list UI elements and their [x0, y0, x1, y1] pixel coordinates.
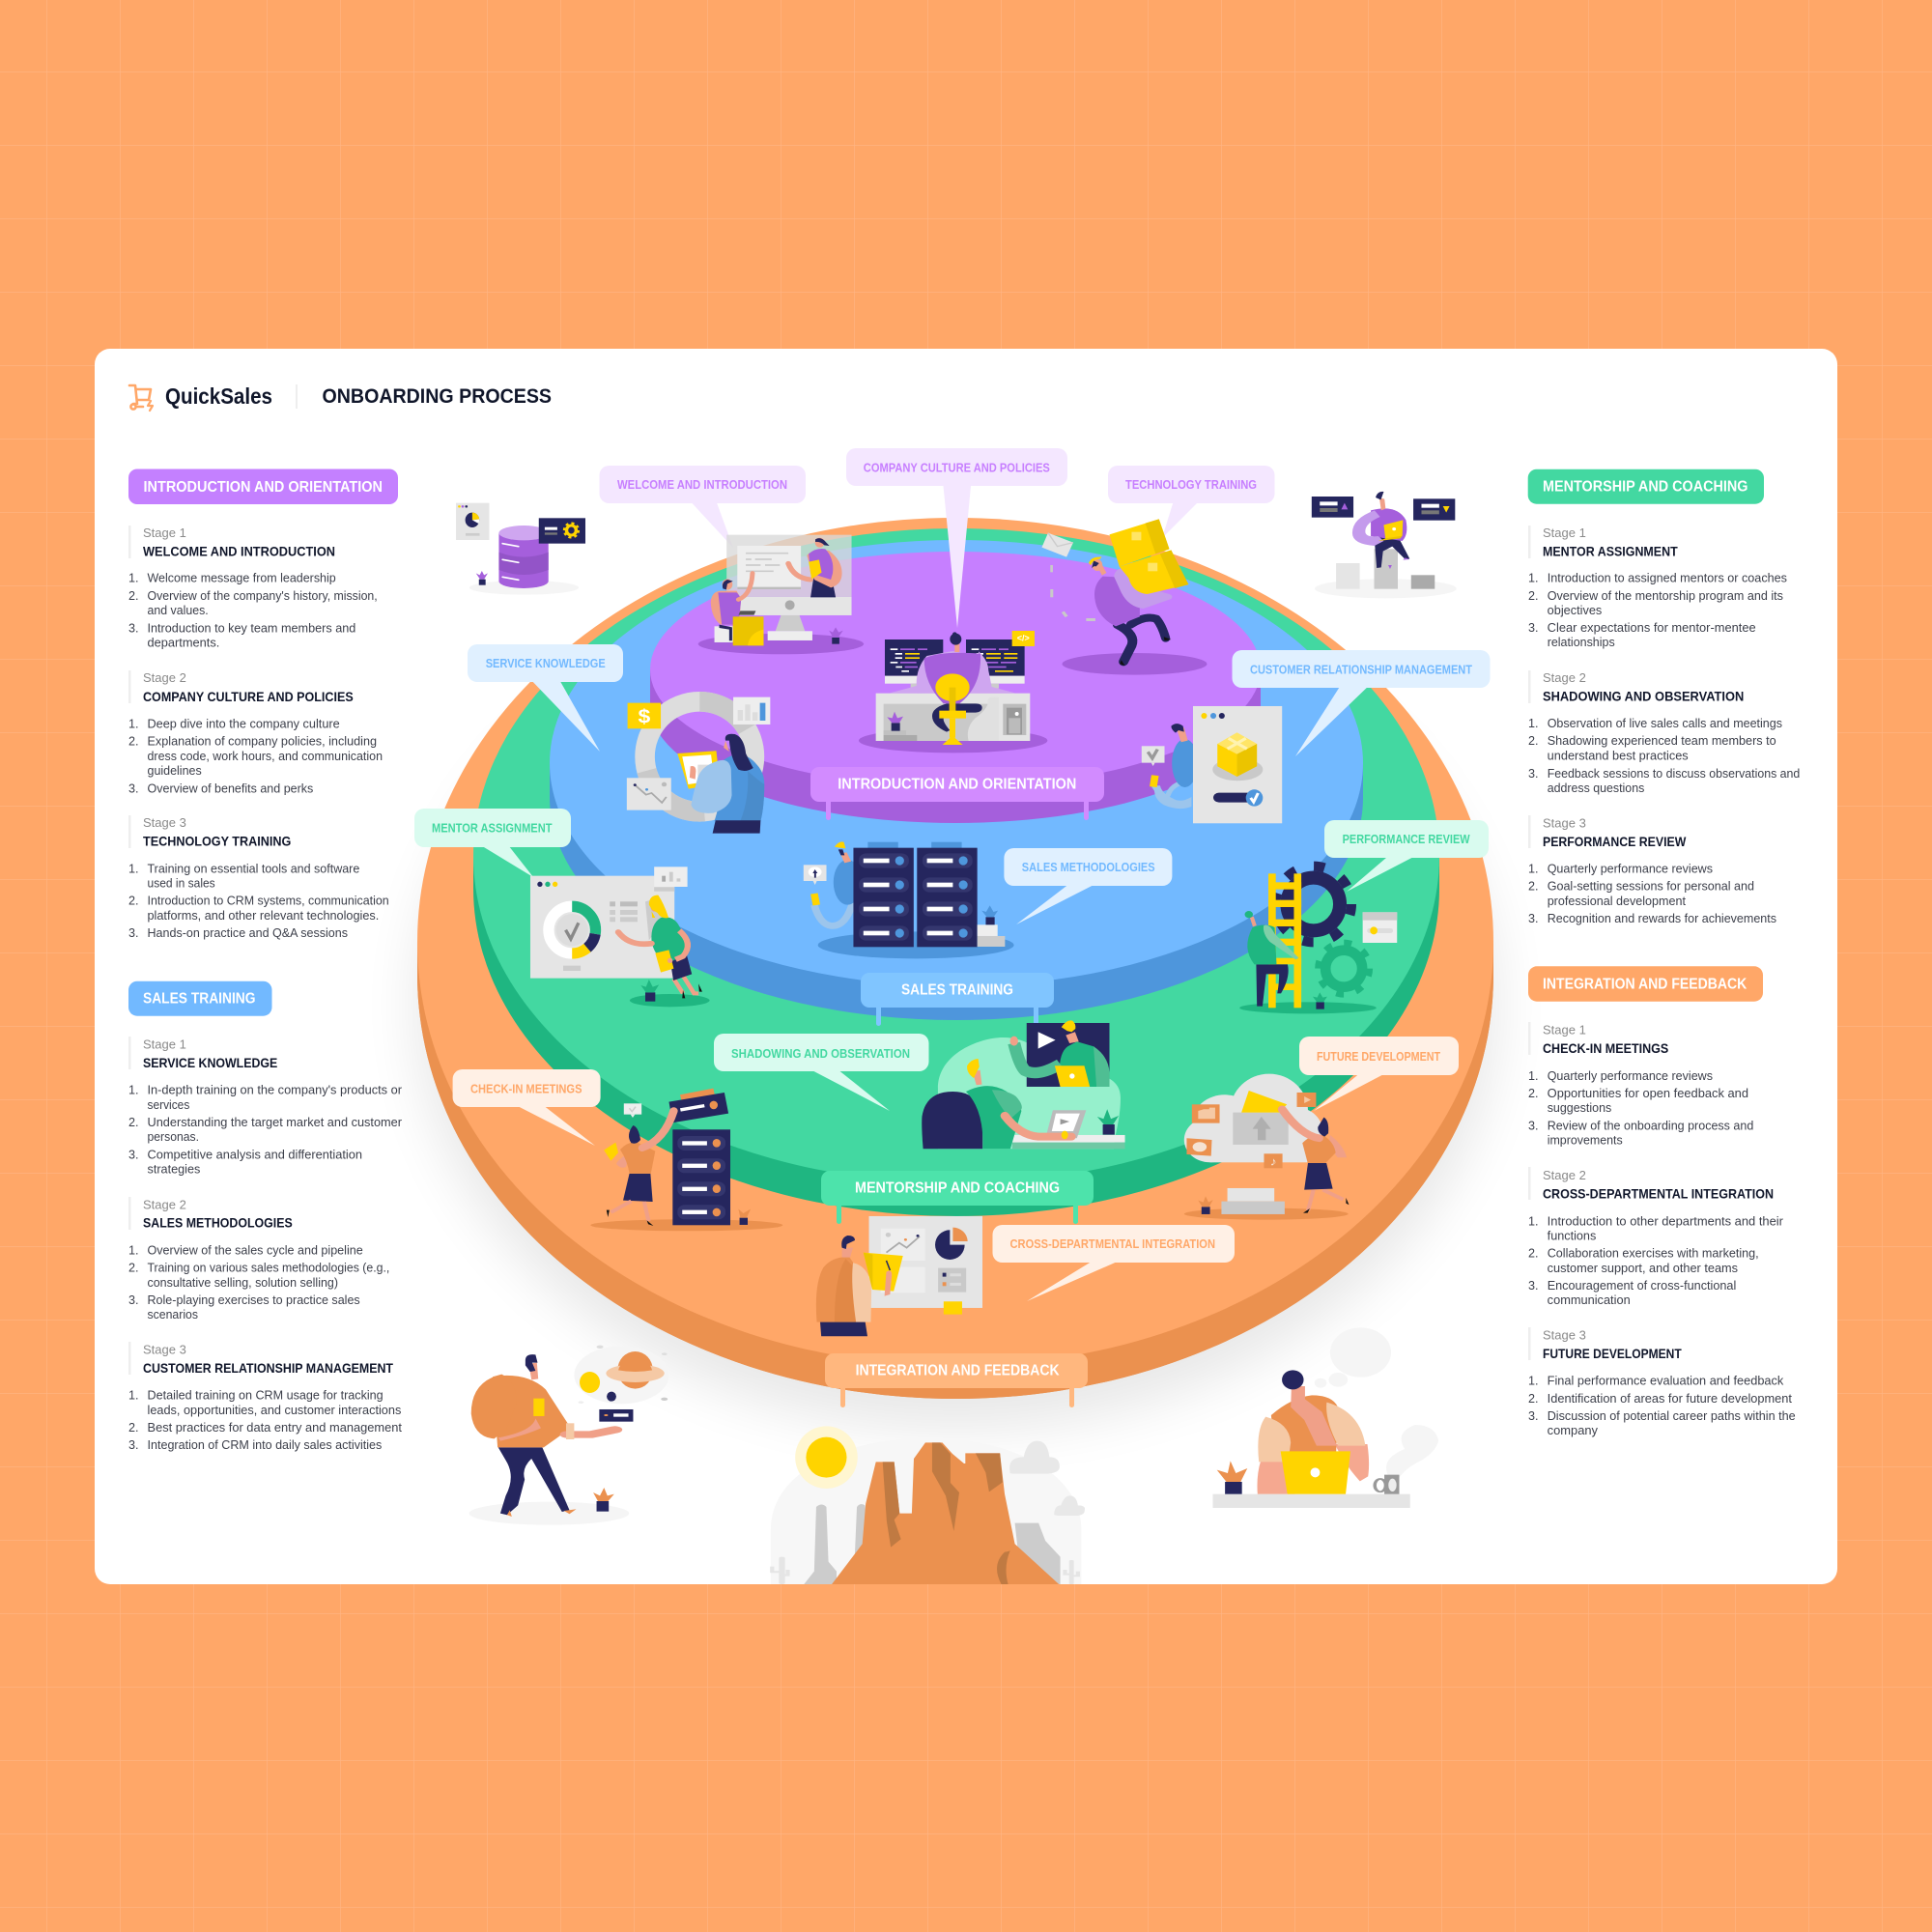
stage 2 text: Training on various sales methodologies (e.g., — [147, 1262, 389, 1275]
illustration: thinking person at laptop — [1212, 1327, 1438, 1508]
stage 2 text: Stage 2 — [1543, 1168, 1586, 1182]
illustration: future development cloud — [1184, 1074, 1349, 1220]
stage 1 text: 1. — [128, 572, 139, 585]
stage 1 text: Stage 1 — [143, 1037, 186, 1052]
label: sales training — [861, 973, 1054, 1026]
callout: cross-departmental integration — [993, 1225, 1235, 1301]
stage 2 text: 1. — [128, 1243, 139, 1257]
callout: service knowledge: SERVICE KNOWLEDGE — [486, 657, 606, 670]
stage 1 text: Stage 1 — [1543, 526, 1586, 540]
stage 3 text: used in sales — [147, 877, 215, 891]
callout: welcome and introduction: WELCOME AND INTRODUCTION — [617, 478, 787, 492]
stage 1 text — [1528, 1022, 1753, 1148]
callout: future development: FUTURE DEVELOPMENT — [1317, 1050, 1440, 1064]
stage 2 text: 1. — [1528, 717, 1539, 730]
stage 2 text: COMPANY CULTURE AND POLICIES — [143, 690, 354, 704]
heading pill: SALES TRAINING — [143, 990, 255, 1007]
illustration: future development cloud: ♪ — [1270, 1154, 1276, 1168]
stage 3 text: Best practices for data entry and management — [147, 1421, 402, 1435]
illustration: ladder and gears — [1239, 867, 1397, 1013]
stage 2 text: address questions — [1548, 781, 1644, 795]
stage 3 text: Detailed training on CRM usage for tracking — [147, 1389, 384, 1403]
stage 3 text: Integration of CRM into daily sales activities — [147, 1438, 382, 1452]
stage 1 text: SERVICE KNOWLEDGE — [143, 1056, 277, 1070]
callout: sales methodologies — [1004, 848, 1172, 924]
panel: introduction and orientation — [128, 469, 398, 940]
callout: shadowing and observation: SHADOWING AND OBSERVATION — [731, 1047, 910, 1061]
white card panel — [95, 349, 1837, 1584]
stage 2 text: Observation of live sales calls and meetings — [1548, 717, 1782, 730]
stage 1 text: Review of the onboarding process and — [1548, 1119, 1753, 1132]
stage 3 text: Introduction to CRM systems, communication — [147, 895, 389, 908]
heading pill: MENTORSHIP AND COACHING — [1543, 478, 1748, 495]
stage 3 text: Stage 3 — [143, 1343, 186, 1357]
callout: check-in meetings — [453, 1069, 601, 1146]
callout: mentor assignment: MENTOR ASSIGNMENT — [432, 822, 553, 836]
disk: mentorship and coaching — [473, 528, 1439, 1216]
stage 3 text: Stage 3 — [1543, 1328, 1586, 1343]
stage 1 text: Overview of the mentorship program and its — [1548, 589, 1783, 603]
stage 1 text — [1528, 526, 1787, 649]
stage 1 text: CHECK-IN MEETINGS — [1543, 1041, 1668, 1056]
stage 1 text: personas. — [147, 1130, 199, 1144]
stage 1 text: 2. — [128, 1116, 139, 1129]
stage 3 text: 2. — [128, 1421, 139, 1435]
header: logo and title — [129, 384, 552, 411]
stage 2 text: Role-playing exercises to practice sales — [147, 1293, 360, 1307]
stage 3 text: TECHNOLOGY TRAINING — [143, 835, 291, 849]
stage 3 text: 2. — [1528, 880, 1539, 894]
stage 2 text: 3. — [128, 781, 139, 795]
stage 2 text: Stage 2 — [1543, 670, 1586, 685]
stage 3 text: 2. — [128, 895, 139, 908]
label: integration and feedback — [825, 1353, 1088, 1407]
stage 1 text: Understanding the target market and customer — [147, 1116, 402, 1129]
stage 3 text: 1. — [1528, 1375, 1539, 1388]
callout: service knowledge — [468, 644, 623, 752]
stage 1 text: relationships — [1548, 636, 1615, 649]
stage 2 text: SHADOWING AND OBSERVATION — [1543, 690, 1744, 704]
heading pill — [1528, 469, 1764, 504]
illustration: shadowing video lesson — [922, 1020, 1125, 1149]
stage 3 text — [128, 815, 389, 940]
panel: mentorship and coaching — [1528, 469, 1800, 925]
stage 1 text: Stage 1 — [143, 526, 186, 540]
stage 2 text: Shadowing experienced team members to — [1548, 734, 1776, 748]
stage 3 text: Stage 3 — [1543, 816, 1586, 831]
stage 3 text: 2. — [1528, 1392, 1539, 1406]
callout: shadowing and observation — [714, 1034, 929, 1111]
stage 1 text: 2. — [1528, 589, 1539, 603]
label: introduction and orientation: INTRODUCTION AND ORIENTATION — [838, 777, 1076, 793]
stage 2 text: functions — [1548, 1229, 1596, 1242]
stage 2 text: Encouragement of cross-functional — [1548, 1279, 1736, 1293]
stage 3 text: Training on essential tools and software — [147, 862, 359, 875]
stage 1 text — [128, 526, 378, 649]
stage 1 text: improvements — [1548, 1134, 1623, 1148]
stage 1 text: 1. — [128, 1084, 139, 1097]
callout: cross-departmental integration: CROSS-DEPARTMENTAL INTEGRATION — [1010, 1237, 1215, 1251]
callout: check-in meetings: CHECK-IN MEETINGS — [470, 1082, 582, 1095]
illustration: person on podium — [1312, 492, 1457, 598]
stage 2 text: 2. — [128, 1262, 139, 1275]
illustration: developer at desk — [859, 631, 1047, 753]
stage 1 text: services — [147, 1098, 189, 1112]
callout: company culture and policies: COMPANY CULTURE AND POLICIES — [864, 462, 1050, 475]
panel: integration and feedback — [1528, 966, 1796, 1437]
stage 2 text: Introduction to other departments and their — [1548, 1214, 1783, 1228]
stage 3 text: CUSTOMER RELATIONSHIP MANAGEMENT — [143, 1361, 394, 1376]
stage 3 text: company — [1548, 1424, 1599, 1437]
stage 1 text: 1. — [1528, 572, 1539, 585]
callout: mentor assignment — [414, 809, 571, 877]
illustration: mentor assignment dashboard — [530, 867, 710, 1007]
stage 1 text: 1. — [1528, 1069, 1539, 1083]
heading pill: INTRODUCTION AND ORIENTATION — [143, 479, 383, 496]
stage 3 text: Stage 3 — [143, 815, 186, 830]
stage 3 text: 1. — [128, 1389, 139, 1403]
heading pill: INTEGRATION AND FEEDBACK — [1543, 976, 1747, 992]
brand name: QuickSales — [165, 384, 272, 409]
illustration: check-in meetings — [590, 1089, 782, 1231]
stage 1 text: MENTOR ASSIGNMENT — [1543, 544, 1678, 558]
illustration: customer relationship panel — [1142, 706, 1282, 823]
illustration: cross-departmental board — [816, 1216, 982, 1336]
stage 2 text: Overview of the sales cycle and pipeline — [147, 1243, 363, 1257]
stage 1 text: 3. — [1528, 621, 1539, 635]
stage 1 text: strategies — [147, 1163, 200, 1177]
stage 2 text: Overview of benefits and perks — [147, 781, 313, 795]
stage 2 text: Deep dive into the company culture — [147, 717, 340, 730]
illustration: worker carrying boxes — [1041, 519, 1208, 675]
stage 2 text: dress code, work hours, and communication — [147, 750, 383, 763]
callout: customer relationship management: CUSTOMER RELATIONSHIP MANAGEMENT — [1250, 664, 1472, 677]
chart: stacked disks — [415, 518, 1497, 1430]
stage 1 text: Quarterly performance reviews — [1548, 1069, 1713, 1083]
stage 3 text: FUTURE DEVELOPMENT — [1543, 1347, 1682, 1361]
illustration: developer at desk: </> — [1017, 634, 1030, 643]
stage 1 text: Clear expectations for mentor-mentee — [1548, 621, 1756, 635]
stage 3 text: 3. — [1528, 1409, 1539, 1423]
stage 3 text: PERFORMANCE REVIEW — [1543, 835, 1686, 849]
callout: technology training: TECHNOLOGY TRAINING — [1125, 478, 1257, 492]
stage 2 text: communication — [1548, 1293, 1631, 1307]
stage 3 text: professional development — [1548, 895, 1686, 908]
stage 3 text: Hands-on practice and Q&A sessions — [147, 926, 348, 940]
callout: customer relationship management — [1233, 650, 1490, 756]
stage 2 text: consultative selling, solution selling) — [147, 1276, 338, 1290]
stage 2 text: 2. — [128, 735, 139, 749]
callout: performance review: PERFORMANCE REVIEW — [1343, 833, 1470, 846]
label: mentorship and coaching: MENTORSHIP AND COACHING — [855, 1179, 1060, 1196]
heading pill — [128, 981, 272, 1016]
stage 1 text: Welcome message from leadership — [147, 572, 336, 585]
stage 1 text: objectives — [1548, 604, 1602, 617]
stage 1 text: 2. — [128, 589, 139, 603]
stage 1 text: 3. — [128, 621, 139, 635]
stage 2 text: 3. — [128, 1293, 139, 1307]
disk: integration and feedback — [417, 518, 1493, 1399]
stage 2 text: Stage 2 — [143, 1197, 186, 1211]
stage 2 text: CROSS-DEPARTMENTAL INTEGRATION — [1543, 1186, 1774, 1201]
stage 3 text — [1528, 815, 1776, 925]
stage 1 text: In-depth training on the company's products or — [147, 1084, 402, 1097]
stage 2 text — [128, 670, 383, 795]
stage 3 text: Final performance evaluation and feedback — [1548, 1375, 1784, 1388]
illustration: walking man with planets — [469, 1346, 669, 1525]
panel: sales training — [128, 981, 402, 1452]
stage 2 text: Stage 2 — [143, 670, 186, 685]
stage 2 text: 2. — [1528, 1247, 1539, 1261]
stage 2 text: understand best practices — [1548, 749, 1689, 762]
stage 3 text — [1528, 1327, 1796, 1437]
stage 2 text: 3. — [1528, 767, 1539, 781]
stage 3 text: Recognition and rewards for achievements — [1548, 912, 1776, 925]
stage 1 text: 3. — [1528, 1119, 1539, 1132]
illustration: service knowledge reader: $ — [638, 706, 650, 727]
illustration: database cylinder — [456, 503, 585, 595]
callout: company culture and policies — [846, 448, 1067, 628]
stage 3 text — [128, 1342, 402, 1452]
stage 2 text — [1528, 1167, 1783, 1307]
callout: performance review — [1324, 820, 1489, 892]
heading pill — [1528, 966, 1763, 1002]
stage 2 text: customer support, and other teams — [1548, 1262, 1738, 1275]
stage 2 text: 2. — [1528, 734, 1539, 748]
stage 2 text — [1528, 670, 1800, 795]
stage 1 text: Overview of the company's history, mission, — [147, 589, 378, 603]
stage 3 text: Goal-setting sessions for personal and — [1548, 880, 1754, 894]
stage 1 text: and values. — [147, 604, 209, 617]
stage 1 text: departments. — [147, 636, 219, 649]
callout: sales methodologies: SALES METHODOLOGIES — [1022, 861, 1155, 874]
stage 2 text: Feedback sessions to discuss observations and — [1548, 767, 1800, 781]
stage 1 text: 2. — [1528, 1087, 1539, 1100]
stage 3 text: 3. — [128, 1438, 139, 1452]
stage 1 text: Introduction to assigned mentors or coaches — [1548, 572, 1787, 585]
stage 1 text: Introduction to key team members and — [147, 621, 355, 635]
stage 3 text: Identification of areas for future development — [1548, 1392, 1792, 1406]
illustration: service knowledge reader — [627, 697, 770, 834]
stage 3 text: 1. — [1528, 862, 1539, 875]
stage 3 text: Quarterly performance reviews — [1548, 862, 1713, 875]
stage 1 text: Competitive analysis and differentiation — [147, 1148, 362, 1161]
stage 2 text: Collaboration exercises with marketing, — [1548, 1247, 1759, 1261]
label: introduction and orientation — [810, 767, 1104, 820]
disk: introduction and orientation — [650, 552, 1261, 823]
stage 2 text: 1. — [1528, 1214, 1539, 1228]
stage 1 text: suggestions — [1548, 1101, 1611, 1115]
stage 3 text: 1. — [128, 862, 139, 875]
stage 1 text: 3. — [128, 1148, 139, 1161]
label: integration and feedback: INTEGRATION AND FEEDBACK — [856, 1363, 1060, 1379]
stage 3 text: 3. — [1528, 912, 1539, 925]
icon: shopping cart logo — [129, 385, 153, 411]
callout: future development — [1299, 1037, 1459, 1111]
illustration: desert rock landscape — [770, 1426, 1085, 1584]
stage 2 text — [128, 1197, 389, 1321]
stage 3 text: Discussion of potential career paths within the — [1548, 1409, 1796, 1423]
disk: sales training — [550, 540, 1363, 1020]
illustration: server racks — [804, 841, 1014, 958]
callout: welcome and introduction — [599, 466, 806, 548]
stage 2 text: scenarios — [147, 1308, 198, 1321]
stage 3 text: platforms, and other relevant technologies. — [147, 909, 379, 923]
stage 1 text: Opportunities for open feedback and — [1548, 1087, 1748, 1100]
stage 1 text: Stage 1 — [1543, 1023, 1586, 1037]
stage 2 text: 1. — [128, 717, 139, 730]
callout: technology training — [1108, 466, 1275, 538]
stage 3 text: leads, opportunities, and customer interactions — [147, 1404, 401, 1417]
stage 3 text: 3. — [128, 926, 139, 940]
illustration: welcome presentation at monitor — [698, 535, 864, 654]
stage 1 text — [128, 1037, 402, 1177]
label: sales training: SALES TRAINING — [901, 981, 1013, 998]
stage 2 text: 3. — [1528, 1279, 1539, 1293]
title: ONBOARDING PROCESS — [323, 384, 552, 408]
stage 2 text: Explanation of company policies, including — [147, 735, 377, 749]
stage 2 text: SALES METHODOLOGIES — [143, 1215, 293, 1230]
stage 2 text: guidelines — [147, 764, 202, 778]
stage 1 text: WELCOME AND INTRODUCTION — [143, 545, 335, 559]
heading pill — [128, 469, 398, 504]
label: mentorship and coaching — [821, 1171, 1094, 1224]
